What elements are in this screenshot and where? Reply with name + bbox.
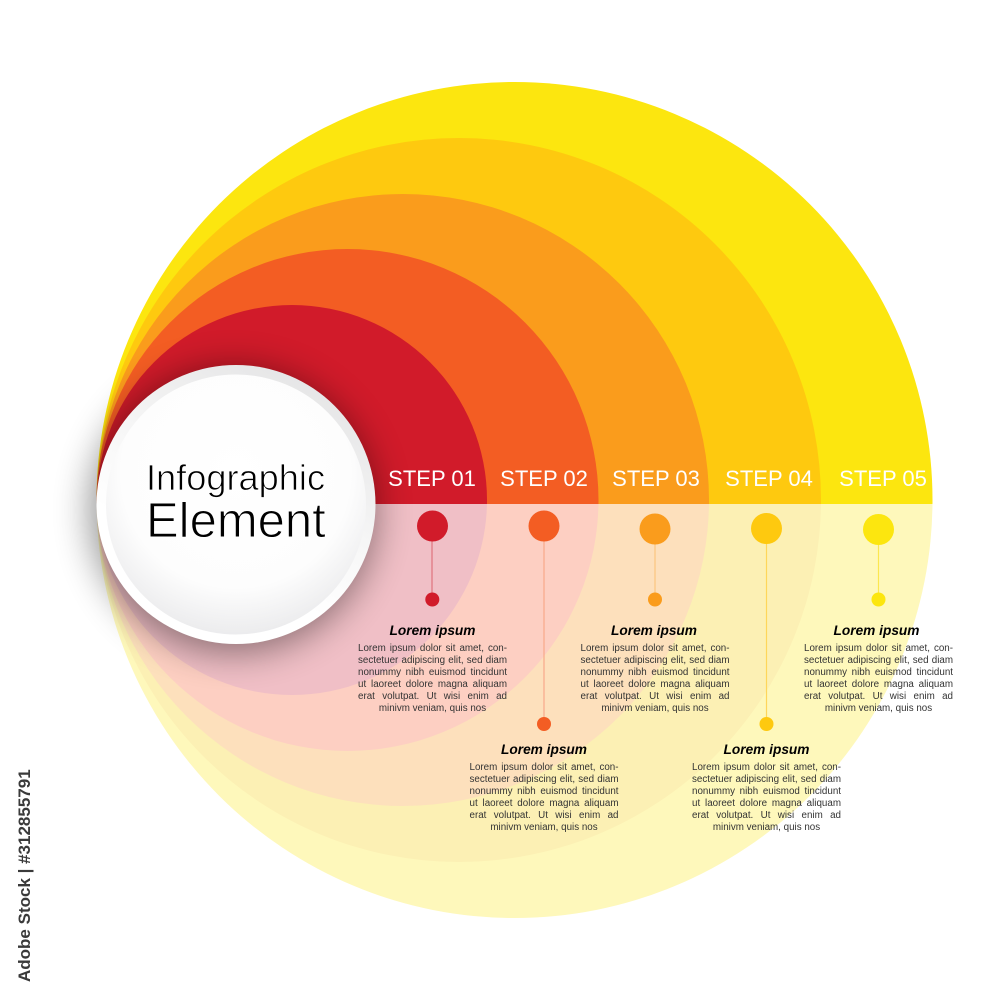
step 3 connector <box>640 514 670 606</box>
text block: step 05: minivm veniam, quis nos <box>825 703 932 714</box>
text block: step 01: ut laoreet dolore magna aliquam <box>358 679 507 690</box>
step 5 connector <box>863 514 894 606</box>
step 05 label: STEP 05 <box>839 466 927 491</box>
center disc shadow <box>90 367 376 653</box>
step 04 label: STEP 04 <box>725 466 813 491</box>
text block: step 02: sectetuer adipiscing elit, sed diam <box>470 774 618 785</box>
lower tinted bands <box>96 504 932 918</box>
text block: step 02: Lorem ipsum dolor sit amet, con- <box>470 762 618 772</box>
text block: step 01: nonummy nibh euismod tincidunt <box>358 667 507 678</box>
text block: step 04: minivm veniam, quis nos <box>713 822 820 833</box>
text: Lorem ipsum <box>724 742 809 756</box>
text block: step 01: erat volutpat. Ut wisi enim ad <box>358 691 507 702</box>
text: Lorem ipsum <box>611 622 697 638</box>
text block: step 02: ut laoreet dolore magna aliquam <box>470 798 618 809</box>
text block: step 01: sectetuer adipiscing elit, sed diam <box>358 655 507 666</box>
step 4 connector <box>751 513 782 731</box>
step 03 label: STEP 03 <box>612 466 700 491</box>
title: Element <box>146 494 326 548</box>
text block: step 03: sectetuer adipiscing elit, sed diam <box>580 655 730 666</box>
text block: step 02 <box>470 742 618 833</box>
text block: step 02: minivm veniam, quis nos <box>490 822 598 833</box>
spiral circle chart <box>67 82 932 918</box>
step 1 connector <box>417 510 448 606</box>
text block: step 04: nonummy nibh euismod tincidunt <box>692 786 841 797</box>
text block: step 05: Lorem ipsum dolor sit amet, con- <box>804 642 953 654</box>
text block: step 03: nonummy nibh euismod tincidunt <box>580 667 730 678</box>
text block: step 01: minivm veniam, quis nos <box>379 703 486 714</box>
text block: step 04 <box>692 742 841 833</box>
text block: step 02: nonummy nibh euismod tincidunt <box>470 786 618 797</box>
text block: step 03: ut laoreet dolore magna aliquam <box>580 679 730 690</box>
upper semicircle bands <box>96 82 932 504</box>
text: Lorem ipsum <box>834 622 919 638</box>
step 01 label: STEP 01 <box>388 466 476 491</box>
title: Infographic <box>146 457 325 498</box>
text block: step 05 <box>804 622 953 714</box>
text: Lorem ipsum <box>501 742 587 756</box>
step 2 connector <box>528 510 560 731</box>
text block: step 05: ut laoreet dolore magna aliquam <box>804 679 953 690</box>
text block: step 05: nonummy nibh euismod tincidunt <box>804 667 953 678</box>
text block: step 04: ut laoreet dolore magna aliquam <box>692 798 841 809</box>
step 02 label: STEP 02 <box>500 466 588 491</box>
center disc <box>96 365 376 644</box>
text block: step 01 <box>358 622 507 714</box>
text block: step 05: sectetuer adipiscing elit, sed diam <box>804 655 953 666</box>
text block: step 01: Lorem ipsum dolor sit amet, con- <box>358 642 507 654</box>
text block: step 05: erat volutpat. Ut wisi enim ad <box>804 691 953 702</box>
text: Lorem ipsum <box>390 622 475 638</box>
vertical stock id label: Adobe Stock | #312855791 <box>15 769 34 982</box>
text block: step 03: Lorem ipsum dolor sit amet, con- <box>580 642 730 654</box>
text block: step 04: erat volutpat. Ut wisi enim ad <box>692 810 841 821</box>
text block: step 04: sectetuer adipiscing elit, sed diam <box>692 774 841 785</box>
text block: step 04: Lorem ipsum dolor sit amet, con- <box>692 762 841 772</box>
text block: step 03 <box>580 622 730 714</box>
text block: step 03: erat volutpat. Ut wisi enim ad <box>580 691 730 702</box>
text block: step 02: erat volutpat. Ut wisi enim ad <box>470 810 618 821</box>
text block: step 03: minivm veniam, quis nos <box>601 703 709 714</box>
title <box>146 457 326 548</box>
